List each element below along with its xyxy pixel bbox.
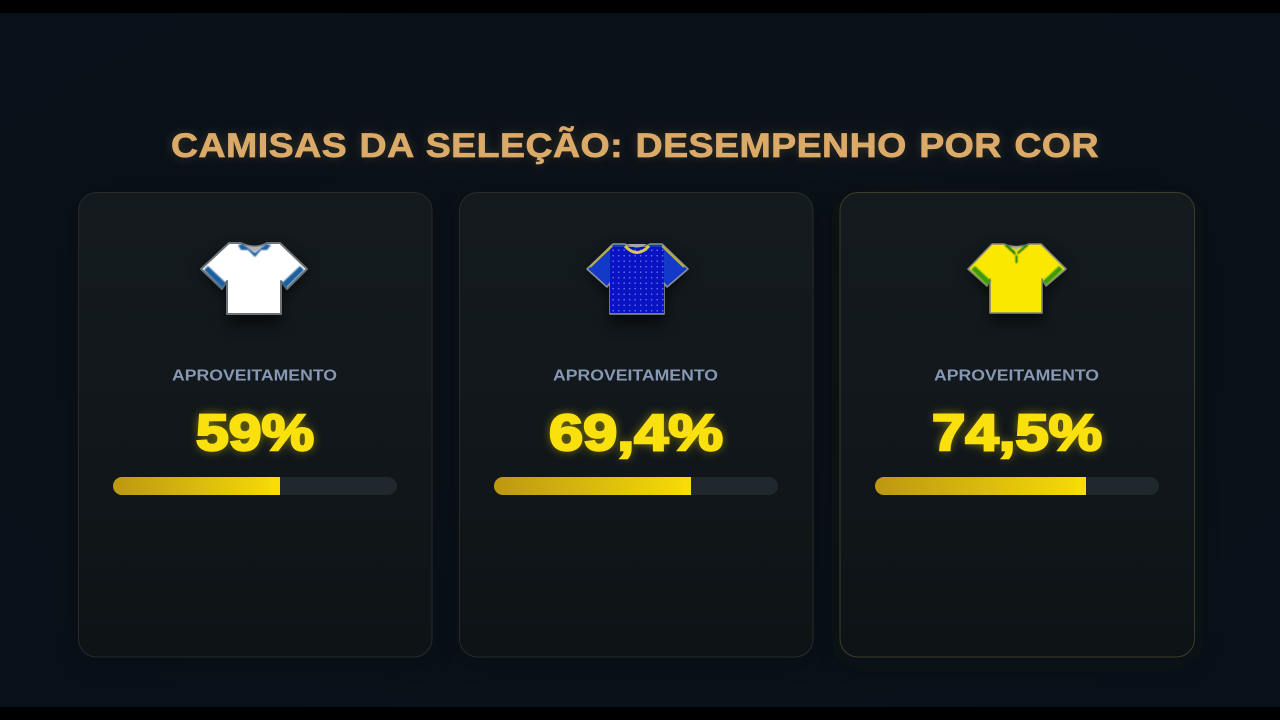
icon: blue shirt <box>587 244 688 324</box>
value: 59%: 59% <box>196 404 314 461</box>
progress bar: 69,4% <box>494 477 778 495</box>
value: 74,5%: 74,5% <box>932 404 1102 461</box>
title: CAMISAS DA SELEÇÃO: DESEMPENHO POR COR <box>171 126 1099 165</box>
value: 69,4%: 69,4% <box>549 404 723 461</box>
progress bar: 59% <box>113 477 397 495</box>
value: 74,5%: 74,5% <box>932 404 1102 461</box>
title: CAMISAS DA SELEÇÃO: DESEMPENHO POR COR <box>171 126 1099 165</box>
panel: white shirt <box>78 192 432 663</box>
label: aproveitamento: APROVEITAMENTO <box>172 368 337 384</box>
panel: yellow shirt <box>840 192 1195 663</box>
progress bar: 74,5% <box>875 477 1159 495</box>
label: aproveitamento: APROVEITAMENTO <box>553 368 718 384</box>
value: 69,4%: 69,4% <box>549 404 723 461</box>
icon: yellow shirt <box>968 244 1066 322</box>
icon: white shirt <box>201 243 308 324</box>
panel: blue shirt <box>459 192 813 663</box>
label: aproveitamento: APROVEITAMENTO <box>934 368 1099 384</box>
value: 59%: 59% <box>196 404 314 461</box>
